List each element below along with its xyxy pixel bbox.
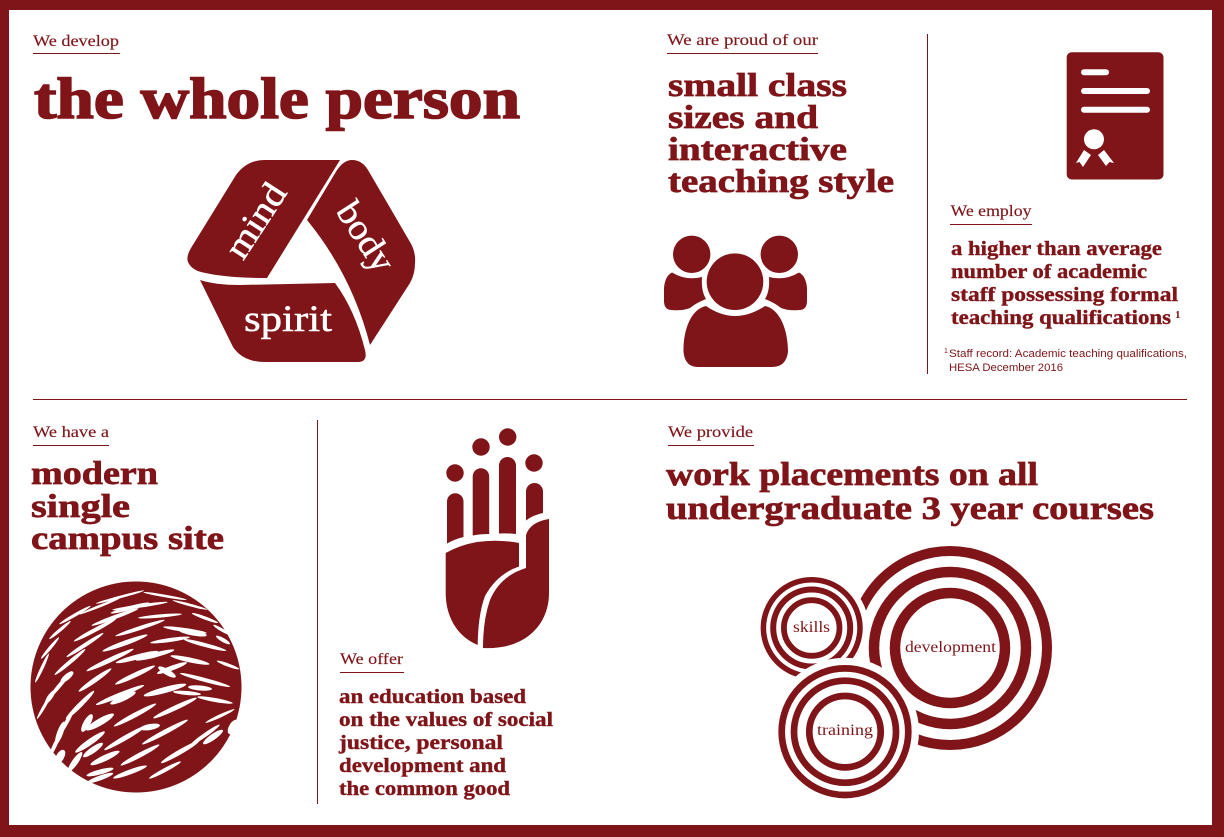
footnote: 1 [944,348,948,355]
heading: work placements: work placements on all [666,457,1038,493]
panel: values [338,428,554,800]
heading: work placements: undergraduate 3 year courses [666,491,1154,527]
rings: skills [755,571,869,685]
icon: certificate [1067,52,1164,179]
segment: spirit [200,280,366,362]
segment: mind [187,160,340,278]
text: education values: an education based [339,686,526,708]
text: academic staff qualifications: staff possessing formal [951,284,1179,306]
heading: small class sizes: interactive [668,132,847,168]
illustration: leaf globe [30,582,242,792]
segment: body: body [329,194,404,279]
label: we offer: We offer [340,651,404,668]
text: academic staff qualifications [951,238,1180,329]
diagram: concentric circles [755,551,1047,806]
label: we provide [668,424,754,446]
heading: small class sizes: small class [668,68,847,104]
label: we employ: We employ [950,203,1032,220]
text: education values: justice, personal [338,732,504,754]
footnote [944,348,1187,374]
rings: development [853,551,1047,745]
text: academic staff qualifications: 1 [1175,309,1180,321]
heading: modern single campus site [31,456,224,557]
panel: class sizes [664,32,894,367]
panel: work placements [666,424,1154,806]
diagram: mind body spirit triad [187,160,415,362]
label: we develop: We develop [33,33,119,50]
heading: modern single campus site: modern [31,456,158,492]
segment: body [307,160,415,345]
heading: modern single campus site: single [31,489,130,525]
rings: skills: skills [793,619,830,636]
text: education values [338,686,554,800]
panel: campus [30,424,242,792]
footnote: HESA December 2016 [949,362,1063,374]
text: academic staff qualifications: a higher than average [951,238,1162,260]
rings: development: development [905,639,997,656]
icon: raised hand [446,428,549,648]
heading: modern single campus site: campus site [31,521,224,557]
label: we have a [33,424,109,446]
label: we are proud of our: We are proud of our [667,32,819,49]
panel: qualified staff [944,52,1187,374]
label: we provide: We provide [668,424,753,441]
footnote: Staff record: Academic teaching qualifications, [949,348,1187,360]
label: we have a: We have a [33,424,109,441]
icon: group of people [664,236,807,367]
heading: work placements [666,457,1154,527]
label: we employ [950,203,1032,225]
label: we offer [340,651,404,673]
text: education values: the common good [339,778,510,800]
heading: small class sizes: teaching style [668,164,894,200]
text: education values: development and [339,755,506,777]
panel: whole person [33,33,520,362]
rings: training: training [817,722,873,739]
segment: spirit: spirit [244,299,333,340]
heading: small class sizes [668,68,894,200]
text: education values: on the values of social [339,709,554,731]
rings: training [771,658,919,806]
heading: small class sizes: sizes and [668,100,818,136]
text: academic staff qualifications: number of academic [951,261,1147,283]
title: the whole person: the whole person [34,66,520,131]
text: academic staff qualifications: teaching qualifications [951,307,1171,329]
segment: mind: mind [216,175,295,266]
